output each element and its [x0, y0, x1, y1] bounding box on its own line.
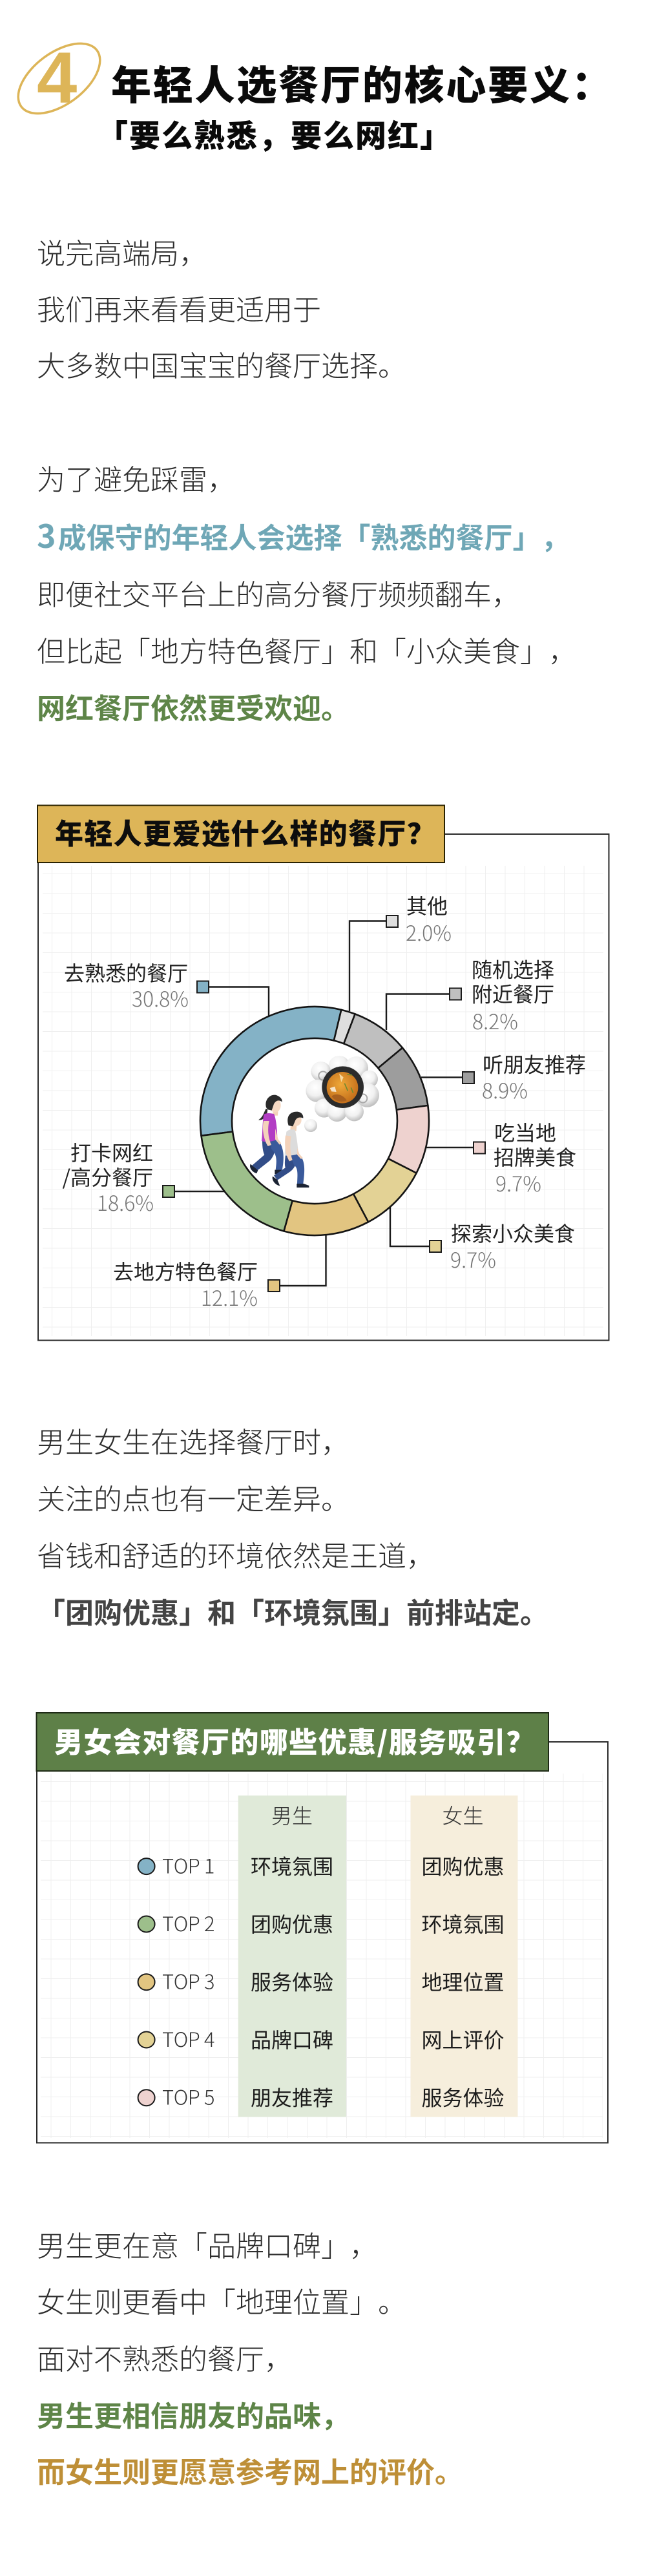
column: female: 网上评价 [421, 2024, 505, 2054]
chart heading: 年轻人更爱选什么样的餐厅？ [55, 811, 436, 852]
legend: TOP 4 [138, 2024, 214, 2053]
panel: restaurant preference donut chart [37, 805, 610, 1341]
legend: TOP 3 [138, 1965, 214, 1995]
callout: 随机选择附近餐厅 8.2%: 随机选择 [472, 954, 554, 983]
callout: 随机选择附近餐厅 8.2% [386, 954, 554, 1036]
text block: avoiding bad restaurants: 但比起「地方特色餐厅」和「小众美食」， [37, 629, 577, 670]
callout: 去地方特色餐厅 12.1%: 去地方特色餐厅 [113, 1256, 258, 1286]
title: 年轻人选餐厅的核心要义： [111, 53, 614, 111]
column: male: 环境氛围 [251, 1850, 333, 1880]
text block: gender differences: 「团购优惠」和「环境氛围」前排站定。 [37, 1590, 548, 1631]
icon: food thought bubble [306, 1056, 379, 1122]
icon: number 4 in ellipse [17, 37, 101, 118]
column: female: 地理位置 [421, 1967, 505, 1996]
callout: 其他 2.0%: 其他 [406, 890, 448, 920]
legend: TOP 4: TOP 4 [162, 2024, 214, 2053]
text block: conclusion: 而女生则更愿意参考网上的评价。 [37, 2449, 463, 2491]
callout: 听朋友推荐 8.9%: 8.9% [482, 1075, 528, 1105]
text block: gender differences: 省钱和舒适的环境依然是王道， [37, 1533, 435, 1575]
callout: 去熟悉的餐厅 30.8%: 30.8% [132, 983, 189, 1013]
icon: walking man [273, 1112, 309, 1188]
legend: TOP 5: TOP 5 [162, 2082, 214, 2110]
callout: 随机选择附近餐厅 8.2%: 8.2% [472, 1006, 518, 1036]
column: male: 朋友推荐 [251, 2082, 333, 2111]
callout: 打卡网红/高分餐厅 18.6%: /高分餐厅 [62, 1162, 153, 1191]
donut chart [200, 1007, 429, 1235]
text block: avoiding bad restaurants: 即便社交平台上的高分餐厅频频翻车， [37, 572, 520, 613]
text block: avoiding bad restaurants [37, 457, 577, 727]
legend: TOP 1 [138, 1850, 214, 1879]
column: female [411, 1796, 518, 2117]
text block: conclusion: 男生更相信朋友的品味， [37, 2393, 349, 2435]
legend: TOP 2: TOP 2 [162, 1908, 214, 1937]
callout: 探索小众美食 9.7%: 9.7% [450, 1244, 496, 1274]
legend: TOP 2 [138, 1908, 214, 1937]
text block: gender differences: 关注的点也有一定差异。 [37, 1476, 349, 1518]
callout: 探索小众美食 9.7%: 探索小众美食 [451, 1218, 575, 1248]
text block: intro: 大多数中国宝宝的餐厅选择。 [37, 343, 406, 384]
column: male: 品牌口碑 [251, 2024, 333, 2054]
column: male [238, 1796, 346, 2117]
text block: intro: 我们再来看看更适用于 [37, 287, 321, 328]
callout: 其他 2.0%: 2.0% [406, 917, 452, 947]
icon: thought ball [304, 1119, 317, 1132]
chart frame [38, 834, 609, 1340]
callout: 去地方特色餐厅 12.1% [113, 1235, 326, 1312]
column: female: 团购优惠 [421, 1850, 505, 1880]
callout: 吃当地招牌美食 9.7%: 吃当地 [494, 1117, 556, 1147]
table frame [37, 1742, 608, 2142]
callout: 打卡网红/高分餐厅 18.6% [62, 1137, 224, 1217]
callout: 打卡网红/高分餐厅 18.6%: 18.6% [97, 1188, 154, 1217]
callout: 听朋友推荐 8.9%: 听朋友推荐 [483, 1049, 586, 1079]
callout: 吃当地招牌美食 9.7%: 招牌美食 [494, 1142, 576, 1171]
legend: TOP 1: TOP 1 [162, 1850, 214, 1879]
text block: avoiding bad restaurants: 为了避免踩雷， [37, 457, 236, 498]
legend: TOP 5 [138, 2082, 214, 2110]
icon: number 4 in ellipse: 4 [37, 37, 77, 118]
column: male: 团购优惠 [251, 1909, 333, 1938]
callout: 去熟悉的餐厅 30.8% [64, 958, 269, 1016]
callout: 打卡网红/高分餐厅 18.6%: 打卡网红 [70, 1137, 153, 1167]
column: female: 环境氛围 [421, 1909, 505, 1938]
text block: conclusion: 面对不熟悉的餐厅， [37, 2336, 293, 2378]
column: male: 男生 [271, 1800, 313, 1830]
subtitle: 「要么熟悉，要么网红」 [97, 110, 452, 156]
text block: avoiding bad restaurants: 网红餐厅依然更受欢迎。 [37, 686, 349, 727]
table heading [36, 1713, 548, 1771]
column: female: 女生 [442, 1800, 484, 1830]
callout: 探索小众美食 9.7% [390, 1207, 575, 1274]
text block: gender differences [37, 1419, 548, 1631]
callout: 随机选择附近餐厅 8.2%: 附近餐厅 [472, 978, 554, 1008]
callout: 吃当地招牌美食 9.7%: 9.7% [495, 1168, 541, 1198]
text block: conclusion: 女生则更看中「地理位置」。 [37, 2279, 406, 2321]
callout: 去地方特色餐厅 12.1%: 12.1% [201, 1283, 258, 1312]
callout: 听朋友推荐 8.9% [421, 1049, 586, 1105]
text block: conclusion [37, 2223, 463, 2491]
text block: intro [37, 231, 406, 384]
callout: 去熟悉的餐厅 30.8%: 去熟悉的餐厅 [64, 958, 188, 987]
text block: intro: 说完高端局， [37, 231, 207, 272]
text block: conclusion: 男生更在意「品牌口碑」， [37, 2223, 378, 2264]
column: male: 服务体验 [251, 1967, 333, 1996]
table heading: 男女会对餐厅的哪些优惠/服务吸引？ [54, 1719, 536, 1761]
column: female: 服务体验 [421, 2082, 505, 2111]
callout: 吃当地招牌美食 9.7% [426, 1117, 576, 1198]
icon: walking woman [250, 1095, 284, 1174]
legend: TOP 3: TOP 3 [162, 1965, 214, 1995]
text block: avoiding bad restaurants: 3成保守的年轻人会选择「熟悉的餐厅」， [37, 511, 570, 558]
text block: gender differences: 男生女生在选择餐厅时， [37, 1419, 349, 1461]
callout: 其他 2.0% [349, 890, 452, 1011]
chart heading [37, 805, 444, 863]
